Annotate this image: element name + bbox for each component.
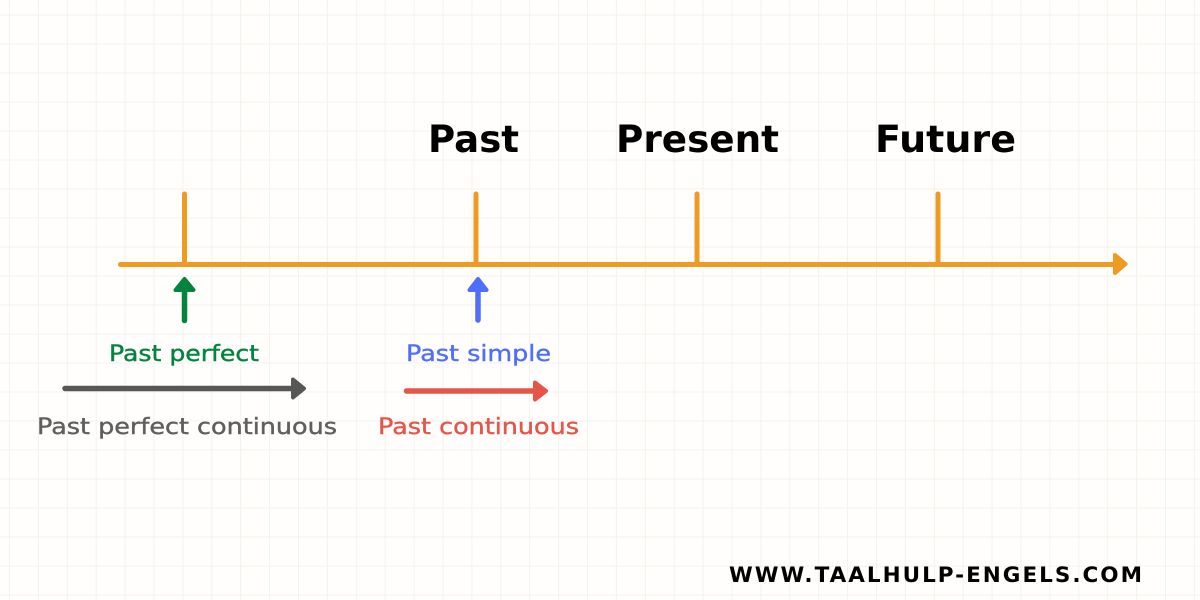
timeline axis with tick marks bbox=[120, 194, 1126, 273]
heading: Past: Past bbox=[428, 118, 519, 161]
heading: Future: Future bbox=[875, 118, 1016, 161]
label: Past perfect continuous: Past perfect continuous bbox=[37, 415, 337, 440]
arrow: past perfect marker bbox=[176, 279, 194, 320]
label: Past perfect: Past perfect bbox=[109, 342, 259, 367]
label: Past continuous: Past continuous bbox=[378, 415, 579, 440]
website credit: WWW.TAALHULP-ENGELS.COM bbox=[729, 563, 1144, 588]
label: Past simple: Past simple bbox=[406, 342, 551, 367]
heading: Present: Present bbox=[616, 118, 779, 161]
arrow: past perfect continuous span bbox=[65, 380, 304, 398]
arrow: past continuous span bbox=[406, 382, 546, 400]
arrow: past simple marker bbox=[470, 279, 486, 320]
